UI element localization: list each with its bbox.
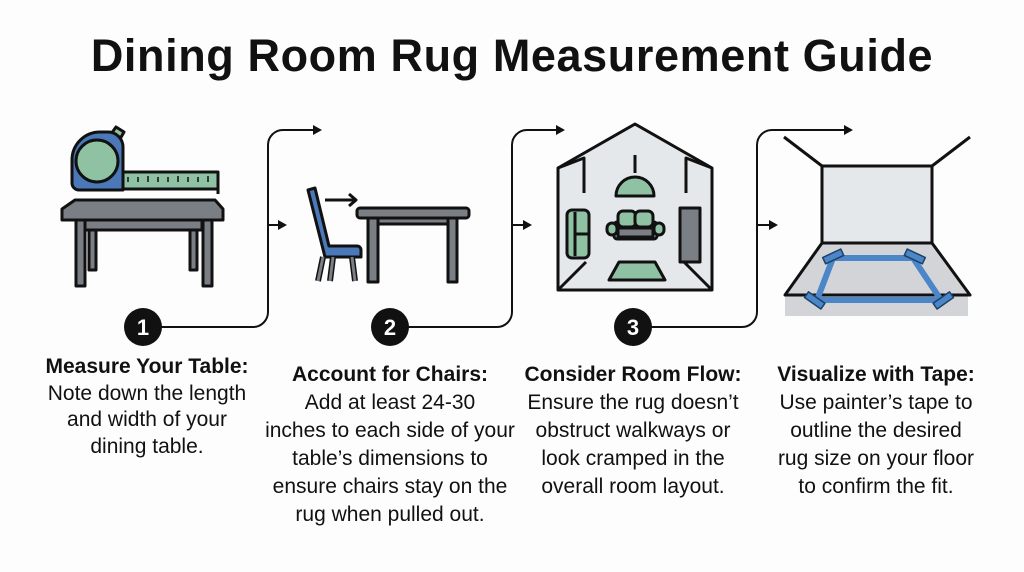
step number badges: 2 — [384, 315, 396, 340]
step 4 text: to confirm the fit. — [798, 475, 954, 498]
step 3 text: Ensure the rug doesn’t — [527, 391, 739, 414]
step 1 text: Measure Your Table: — [45, 355, 249, 378]
step 3 text: overall room layout. — [541, 475, 725, 498]
step 4 text: Visualize with Tape: — [777, 363, 975, 386]
icon: tape measure on table — [62, 127, 223, 286]
title: Dining Room Rug Measurement Guide — [91, 30, 933, 81]
step 1 text: dining table. — [90, 434, 204, 458]
icon: room layout — [558, 124, 712, 290]
step number badges — [124, 308, 652, 346]
step 4 text — [777, 363, 975, 498]
step 1 text — [45, 355, 249, 458]
step 3 text — [524, 363, 742, 498]
step 2 text: Add at least 24-30 — [305, 391, 475, 414]
step 2 text: Account for Chairs: — [292, 363, 488, 386]
step 3 text: Consider Room Flow: — [524, 363, 742, 386]
step number badges: 3 — [627, 315, 639, 340]
icon: chair and table — [308, 188, 469, 282]
step 2 text: inches to each side of your — [265, 419, 515, 442]
step 4 text: outline the desired — [790, 419, 962, 442]
step 4 text: Use painter’s tape to — [779, 391, 972, 414]
step 2 text: ensure chairs stay on the — [273, 475, 507, 498]
step 1 text: and width of your — [67, 408, 227, 431]
step 2 text: rug when pulled out. — [295, 503, 485, 526]
step 2 text — [265, 363, 515, 526]
step 3 text: look cramped in the — [541, 447, 725, 470]
connector arrows — [160, 130, 850, 327]
step 1 text: Note down the length — [48, 382, 246, 404]
step 3 text: obstruct walkways or — [536, 419, 730, 442]
step number badges: 1 — [137, 315, 149, 340]
icon: room with tape outline — [784, 137, 970, 316]
step 4 text: rug size on your floor — [778, 447, 974, 470]
step 2 text: table’s dimensions to — [292, 447, 488, 470]
